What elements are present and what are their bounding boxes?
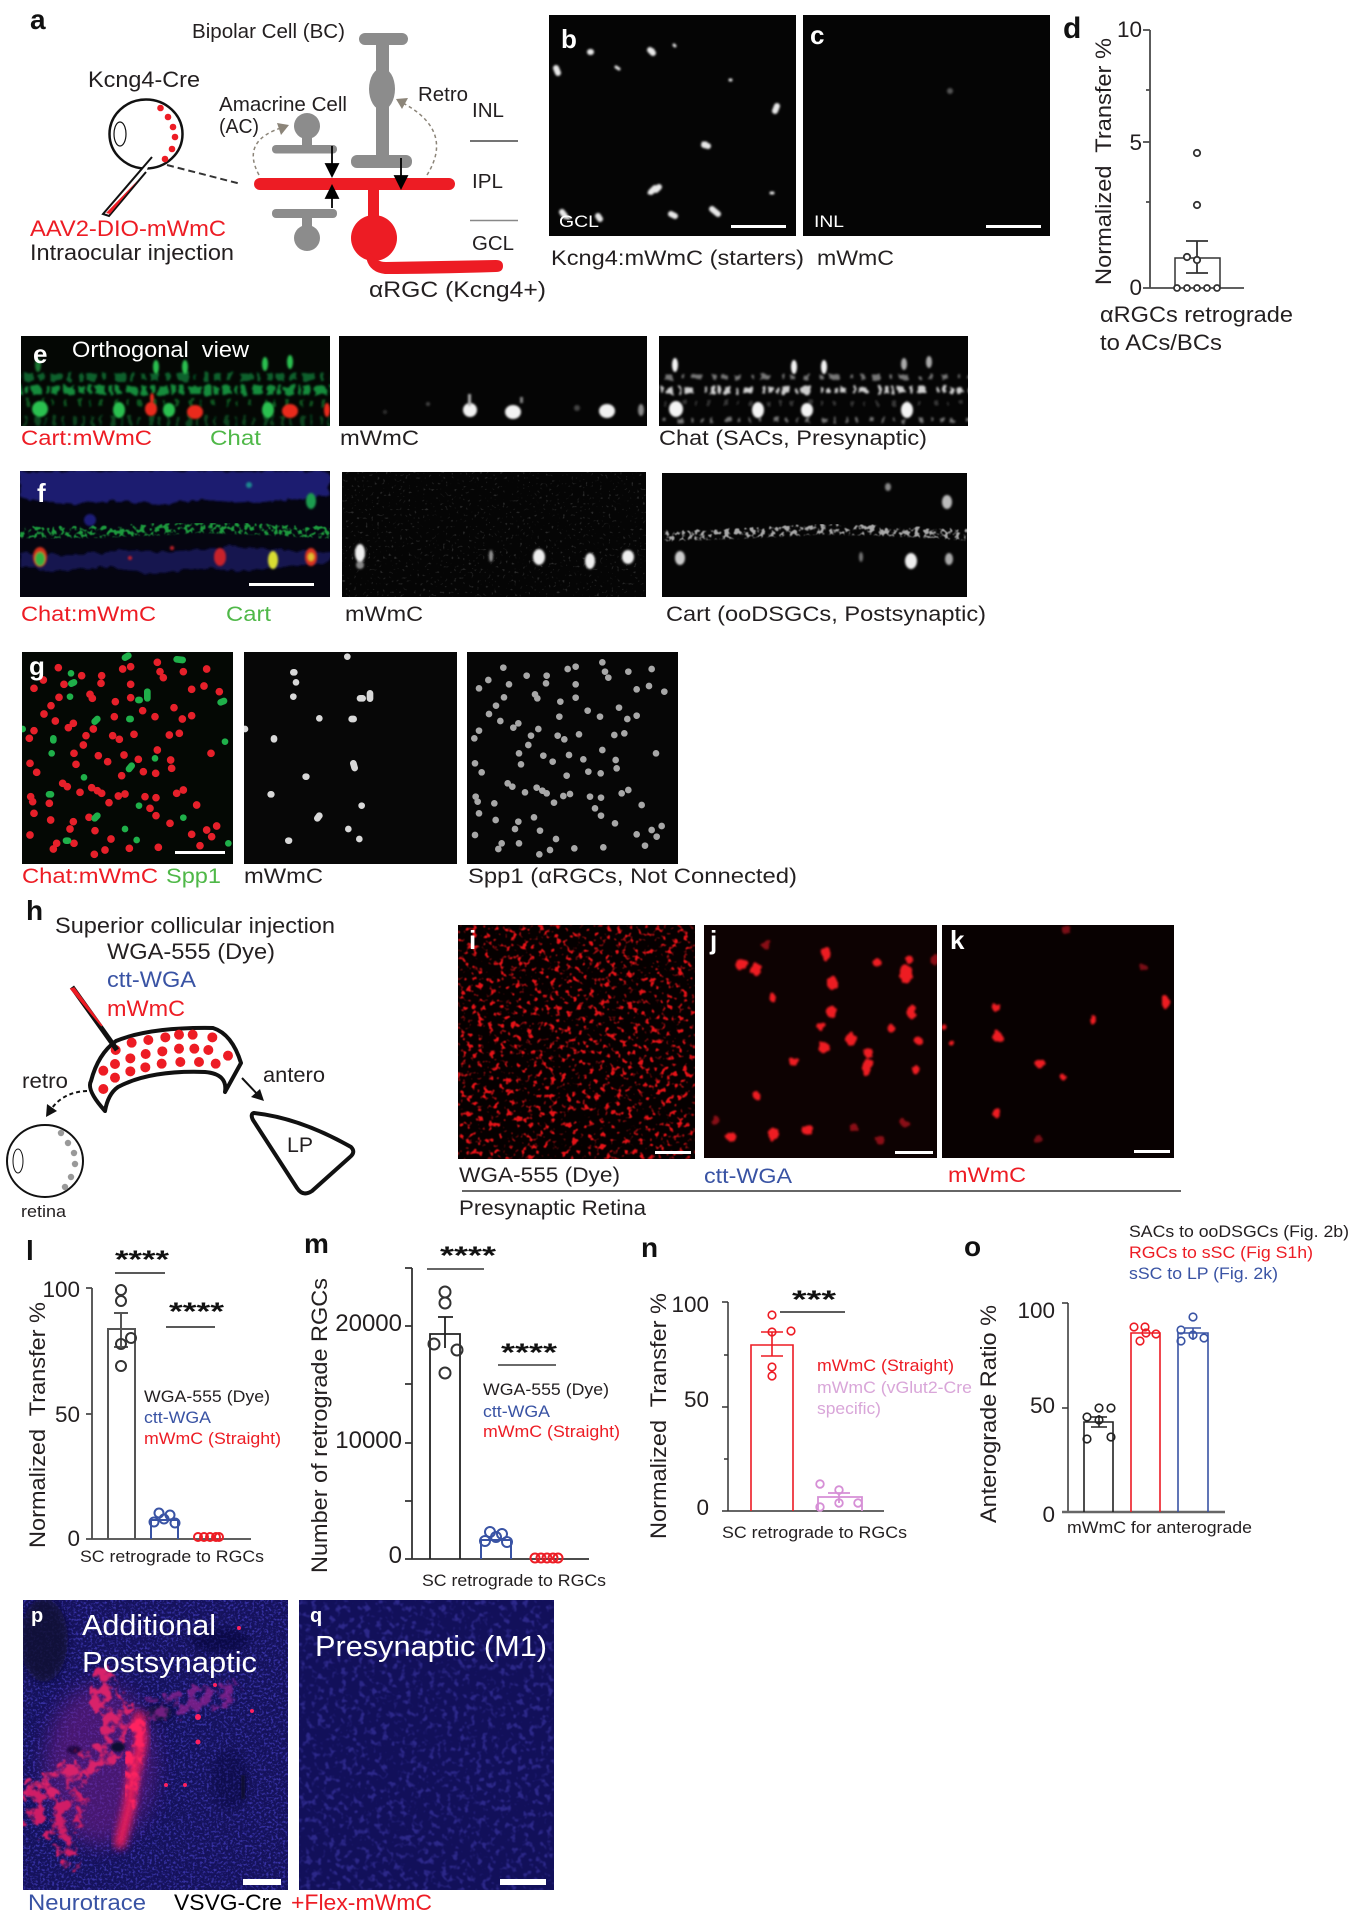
arrows: dashed retrograde [167, 102, 437, 184]
scale bar [986, 225, 1041, 228]
panel letter l: l [26, 1235, 34, 1266]
panel f: mWmC channel [342, 472, 646, 597]
caption Chat:mWmC: Chat:mWmC [21, 602, 156, 626]
panel k: mWmC micrograph [942, 925, 1174, 1158]
tick labels: 10 [1117, 17, 1142, 42]
tick labels: 100 [1017, 1298, 1055, 1323]
panel j: ctt-WGA micrograph [704, 925, 937, 1158]
panel n: bar chart [641, 1232, 972, 1542]
panel letter j: j [709, 925, 717, 955]
legend: mWmC (Straight) [483, 1422, 620, 1441]
label: Amacrine Cell: Amacrine Cell [219, 94, 347, 116]
tick labels: 0 [1129, 275, 1142, 300]
legend: sSC to LP (Fig. 2k) [1129, 1264, 1278, 1283]
panel letter e: e [33, 339, 47, 369]
panel e: mWmC channel [339, 336, 647, 426]
scale bar [895, 1151, 933, 1154]
tick labels [671, 1292, 709, 1520]
bar WGA-555 [108, 1285, 136, 1539]
caption Chat:mWmC: Chat:mWmC [22, 864, 158, 888]
caption Presynaptic Retina: Presynaptic Retina [459, 1196, 646, 1220]
caption Cart ooDSGCs: Cart (ooDSGCs, Postsynaptic) [666, 602, 986, 626]
scale bar [249, 583, 314, 586]
tick labels [335, 1310, 402, 1569]
label: Kcng4-Cre: Kcng4-Cre [88, 67, 200, 92]
panel g: merged micrograph [22, 651, 233, 864]
icon: colliculus with dots [90, 1028, 241, 1111]
tick labels [1117, 17, 1142, 300]
bar mWmC straight [751, 1311, 795, 1511]
x label: SC retrograde to RGCs [722, 1523, 907, 1542]
scale bar [175, 851, 225, 854]
axes [1062, 1303, 1068, 1512]
significance line top [115, 1272, 165, 1274]
label mWmC: mWmC [107, 996, 185, 1021]
arrow antero [242, 1078, 264, 1101]
bar mWmC points [194, 1533, 223, 1541]
panel letter n: n [641, 1232, 658, 1263]
icon: upper amacrine cell [272, 113, 337, 154]
tick labels: 5 [1129, 130, 1142, 155]
tick labels: 20000 [335, 1310, 402, 1337]
bar RGCs [1130, 1323, 1160, 1512]
caption: Kcng4 starters: Kcng4:mWmC (starters) [551, 246, 804, 270]
label WGA-555: WGA-555 (Dye) [107, 939, 275, 964]
label: Retro: Retro [418, 84, 468, 106]
caption Spp1 aRGCs: Spp1 (αRGCs, Not Connected) [468, 864, 797, 888]
legend: WGA-555 (Dye) [483, 1380, 609, 1399]
significance stars second: **** [501, 1339, 557, 1367]
panel e: orthogonal merged view [21, 336, 330, 426]
significance line second [498, 1364, 556, 1366]
bar ctt-WGA [480, 1527, 512, 1559]
label ctt-WGA: ctt-WGA [107, 967, 196, 992]
significance stars: *** [792, 1286, 836, 1314]
scale bar [1134, 1150, 1170, 1153]
bar SACs [1083, 1404, 1115, 1512]
legend: RGCs to sSC (Fig S1h) [1129, 1243, 1313, 1262]
bar mWmC vGlut2-Cre [816, 1480, 862, 1511]
panel letter o: o [964, 1231, 981, 1262]
panel letter k: k [950, 925, 965, 955]
captions row e [21, 426, 927, 450]
panel letter b: b [561, 24, 577, 54]
legend: ctt-WGA [144, 1408, 212, 1427]
caption: mWmC: mWmC [817, 246, 894, 270]
tick labels: 50 [55, 1402, 80, 1427]
region label INL: INL [814, 212, 844, 231]
captions row g [22, 864, 797, 888]
caption Cart: Cart [226, 602, 271, 626]
significance line second [166, 1326, 215, 1328]
label: AAV2-DIO-mWmC: AAV2-DIO-mWmC [30, 216, 226, 241]
label LP: LP [287, 1133, 313, 1157]
icon: retina eye [7, 1125, 83, 1197]
label retro: retro [22, 1069, 68, 1093]
bar ctt-WGA [150, 1508, 180, 1539]
panel letter h: h [26, 895, 43, 926]
caption mWmC: mWmC [244, 864, 323, 888]
significance line [780, 1311, 845, 1313]
tick labels: 0 [389, 1542, 402, 1569]
captions row f [21, 602, 986, 626]
legend: mWmC (Straight) [144, 1429, 281, 1448]
tick labels: 0 [1042, 1502, 1055, 1527]
legend: mWmC (vGlut2-Cre [817, 1378, 972, 1397]
x label: SC retrograde to RGCs [80, 1547, 264, 1566]
caption VSVG-Cre: VSVG-Cre [174, 1890, 282, 1915]
legend: SACs to ooDSGCs (Fig. 2b) [1129, 1222, 1349, 1241]
tick labels [42, 1277, 80, 1551]
label: AC: (AC) [219, 116, 259, 138]
legend [817, 1356, 972, 1418]
panel letter q: q [310, 1605, 322, 1627]
icon: LP region [252, 1113, 353, 1193]
scale bar [731, 225, 786, 228]
captions row i j k [459, 1163, 1181, 1220]
icon: alpha RGC in red [254, 178, 503, 274]
axes [405, 1268, 589, 1559]
icon: eye with injection [103, 100, 182, 216]
panel letter d: d [1063, 12, 1081, 45]
tick labels: 50 [684, 1387, 709, 1412]
panel f: merged micrograph [20, 471, 330, 597]
panel g: Spp1 channel [467, 652, 678, 864]
x label: mWmC for anterograde [1067, 1518, 1252, 1537]
panel letter f: f [37, 478, 46, 508]
caption Spp1: Spp1 [166, 864, 221, 888]
significance stars top: **** [115, 1246, 169, 1274]
y axis title: Anterograde Ratio % [976, 1305, 1001, 1523]
label: GCL: GCL [472, 233, 514, 255]
panel letter g: g [29, 651, 45, 681]
panel letter i: i [469, 925, 476, 955]
label antero: antero [263, 1063, 325, 1087]
label: IPL: IPL [472, 171, 503, 193]
legend: specific) [817, 1399, 881, 1418]
legend [144, 1387, 281, 1448]
region label GCL: GCL [559, 212, 599, 231]
panel m: bar chart [304, 1228, 620, 1590]
caption Flex-mWmC: +Flex-mWmC [291, 1890, 432, 1915]
panel c: mWmC micrograph [803, 15, 1050, 236]
x label: SC retrograde to RGCs [422, 1571, 606, 1590]
x label line 1: αRGCs retrograde [1100, 302, 1293, 327]
caption ctt-WGA: ctt-WGA [704, 1164, 793, 1188]
scale bar [500, 1879, 546, 1885]
significance stars top: **** [440, 1242, 496, 1270]
bracket line [462, 1190, 1181, 1192]
arrow retro dashed [46, 1091, 87, 1117]
label: aRGC Kcng4+: αRGC (Kcng4+) [369, 277, 546, 302]
title Additional: Additional [82, 1610, 216, 1642]
caption Chat SACs: Chat (SACs, Presynaptic) [659, 426, 927, 450]
label retina: retina [21, 1202, 67, 1221]
bar WGA-555 [428, 1286, 462, 1559]
label: Bipolar Cell: Bipolar Cell (BC) [192, 21, 345, 43]
panel d: bar chart [1063, 12, 1293, 355]
panel l: bar chart [25, 1235, 281, 1566]
tick labels: 100 [671, 1292, 709, 1317]
title Presynaptic M1: Presynaptic (M1) [315, 1631, 547, 1663]
y axis title: Normalized Transfer % [1091, 38, 1116, 285]
scale bar [243, 1879, 281, 1885]
caption Cart:mWmC: Cart:mWmC [21, 426, 152, 450]
panel h: superior colliculus injection schematic [7, 895, 353, 1221]
tick labels: 50 [1030, 1393, 1055, 1418]
tick labels: 0 [67, 1526, 80, 1551]
panel e: Chat channel [659, 336, 968, 426]
bar sSC [1177, 1313, 1208, 1512]
y axis title: Normalized Transfer % [25, 1302, 50, 1548]
legend: mWmC (Straight) [817, 1356, 954, 1375]
layer divider [470, 220, 518, 222]
label: INL: INL [472, 100, 504, 122]
panel letter m: m [304, 1228, 329, 1259]
caption WGA-555: WGA-555 (Dye) [459, 1163, 620, 1187]
panel g: mWmC channel [244, 652, 457, 864]
scale bar [655, 1151, 691, 1154]
bar with error and points [1174, 150, 1220, 291]
legend: WGA-555 (Dye) [144, 1387, 270, 1406]
icon: injection needle [71, 987, 117, 1050]
icon: lower amacrine cell [272, 209, 337, 251]
panel letter c: c [810, 20, 824, 50]
caption Neurotrace: Neurotrace [28, 1890, 146, 1915]
label: Intraocular injection: Intraocular injection [30, 240, 234, 265]
caption Chat: Chat [210, 426, 261, 450]
significance line top [427, 1268, 484, 1270]
legend: ctt-WGA [483, 1402, 551, 1421]
caption mWmC: mWmC [345, 602, 423, 626]
y axis title: Normalized Transfer % [646, 1293, 671, 1539]
baseline [1062, 1511, 1225, 1513]
icon: bipolar cell [351, 33, 412, 168]
panel q: presynaptic M1 micrograph [299, 1600, 554, 1890]
panel p: additional postsynaptic micrograph [23, 1600, 288, 1890]
panel letter a: a [30, 4, 46, 35]
title Orthogonal view: Orthogonal view [72, 337, 250, 362]
panel a: retinal circuit schematic [30, 4, 546, 302]
heading Superior collicular injection: Superior collicular injection [55, 913, 335, 938]
legend [1129, 1222, 1349, 1283]
tick labels: 0 [696, 1495, 709, 1520]
caption mWmC: mWmC [340, 426, 419, 450]
panel f: Cart channel [662, 473, 967, 597]
x label line 2: to ACs/BCs [1100, 330, 1222, 355]
axes [1143, 30, 1244, 288]
panel i: WGA-555 micrograph [458, 925, 695, 1159]
y axis title: Number of retrograde RGCs [307, 1278, 332, 1573]
arrows: synaptic direction [326, 146, 407, 208]
tick labels [1017, 1298, 1055, 1527]
significance stars second: **** [169, 1298, 224, 1326]
layer divider [470, 140, 518, 142]
tick labels: 100 [42, 1277, 80, 1302]
panel letter p: p [31, 1605, 43, 1627]
legend [483, 1380, 620, 1441]
title Postsynaptic: Postsynaptic [82, 1647, 257, 1679]
bar mWmC points [530, 1554, 562, 1562]
caption mWmC: mWmC [948, 1163, 1026, 1187]
panel b: starter micrograph [549, 15, 796, 236]
axes [86, 1288, 251, 1539]
panel o: bar chart [964, 1222, 1349, 1537]
tick labels: 10000 [335, 1427, 402, 1454]
axes [722, 1302, 884, 1511]
captions row p q [28, 1890, 432, 1915]
arrowheads [277, 98, 408, 135]
